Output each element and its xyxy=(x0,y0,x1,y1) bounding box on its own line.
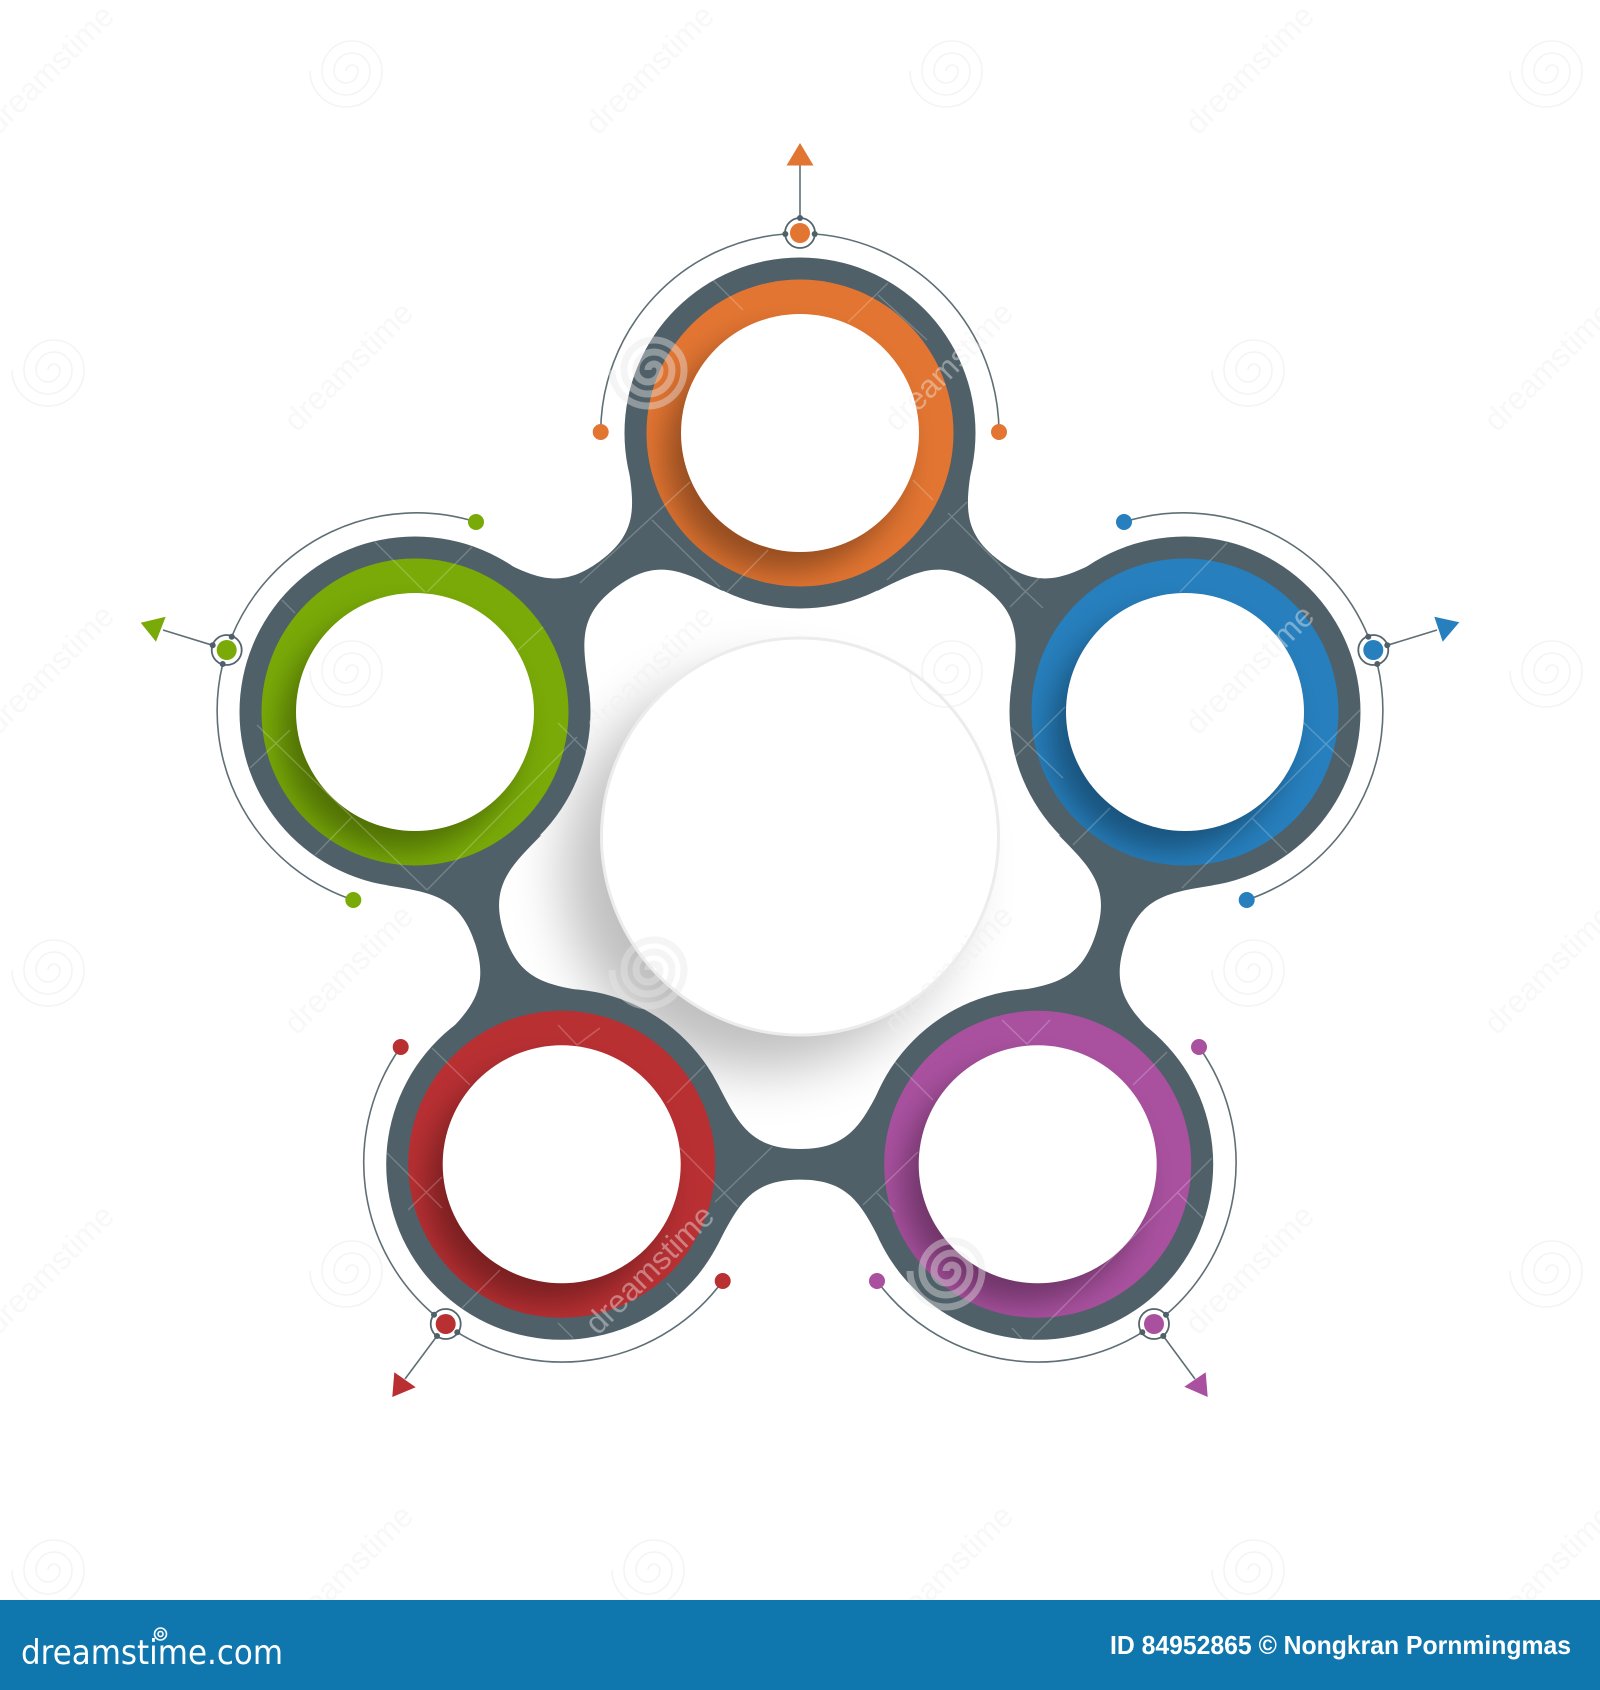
watermark text: dreamstime xyxy=(1177,597,1321,741)
watermark text: dreamstime xyxy=(577,1197,721,1341)
callout: green arcs, node and arrow xyxy=(141,513,484,908)
purple coloured ring xyxy=(884,1011,1191,1318)
central white disc xyxy=(602,638,998,1035)
watermark text: dreamstime xyxy=(876,897,1020,1041)
white disc: green xyxy=(296,593,534,831)
white disc: blue xyxy=(1066,593,1304,831)
footer credit text: ID 84952865 © Nongkran Pornmingmas xyxy=(1110,1630,1571,1660)
callout: red arcs, node and arrow xyxy=(364,1039,731,1397)
green coloured ring xyxy=(262,558,568,866)
watermark text: dreamstime xyxy=(1177,1197,1321,1341)
watermark text: dreamstime xyxy=(876,294,1020,438)
footer logo spiral xyxy=(154,1628,166,1640)
callout: orange arcs, node and arrow xyxy=(593,143,1007,440)
white disc: orange xyxy=(681,314,919,552)
watermark text: dreamstime xyxy=(276,1497,420,1641)
white disc: red xyxy=(443,1045,681,1283)
strong watermark spirals xyxy=(612,340,982,1307)
watermark text: dreamstime xyxy=(876,1497,1020,1641)
white disc: purple xyxy=(919,1045,1157,1283)
orange coloured ring xyxy=(646,280,954,586)
central disc cast shadow xyxy=(564,674,960,1070)
watermark text: dreamstime xyxy=(577,0,721,141)
callout: blue arcs, node and arrow xyxy=(1116,513,1459,908)
footer logo text: dreamstime.com xyxy=(21,1633,283,1673)
blue coloured ring xyxy=(1032,558,1338,866)
footer bar xyxy=(0,1600,1600,1690)
watermark text: dreamstime xyxy=(276,294,420,438)
red coloured ring xyxy=(408,1011,715,1318)
dark connected ring frame xyxy=(240,258,1360,1340)
callout: purple arcs, node and arrow xyxy=(869,1039,1236,1397)
watermark text: dreamstime xyxy=(577,597,721,741)
watermark text: dreamstime xyxy=(276,897,420,1041)
watermark text: dreamstime xyxy=(1177,0,1321,141)
